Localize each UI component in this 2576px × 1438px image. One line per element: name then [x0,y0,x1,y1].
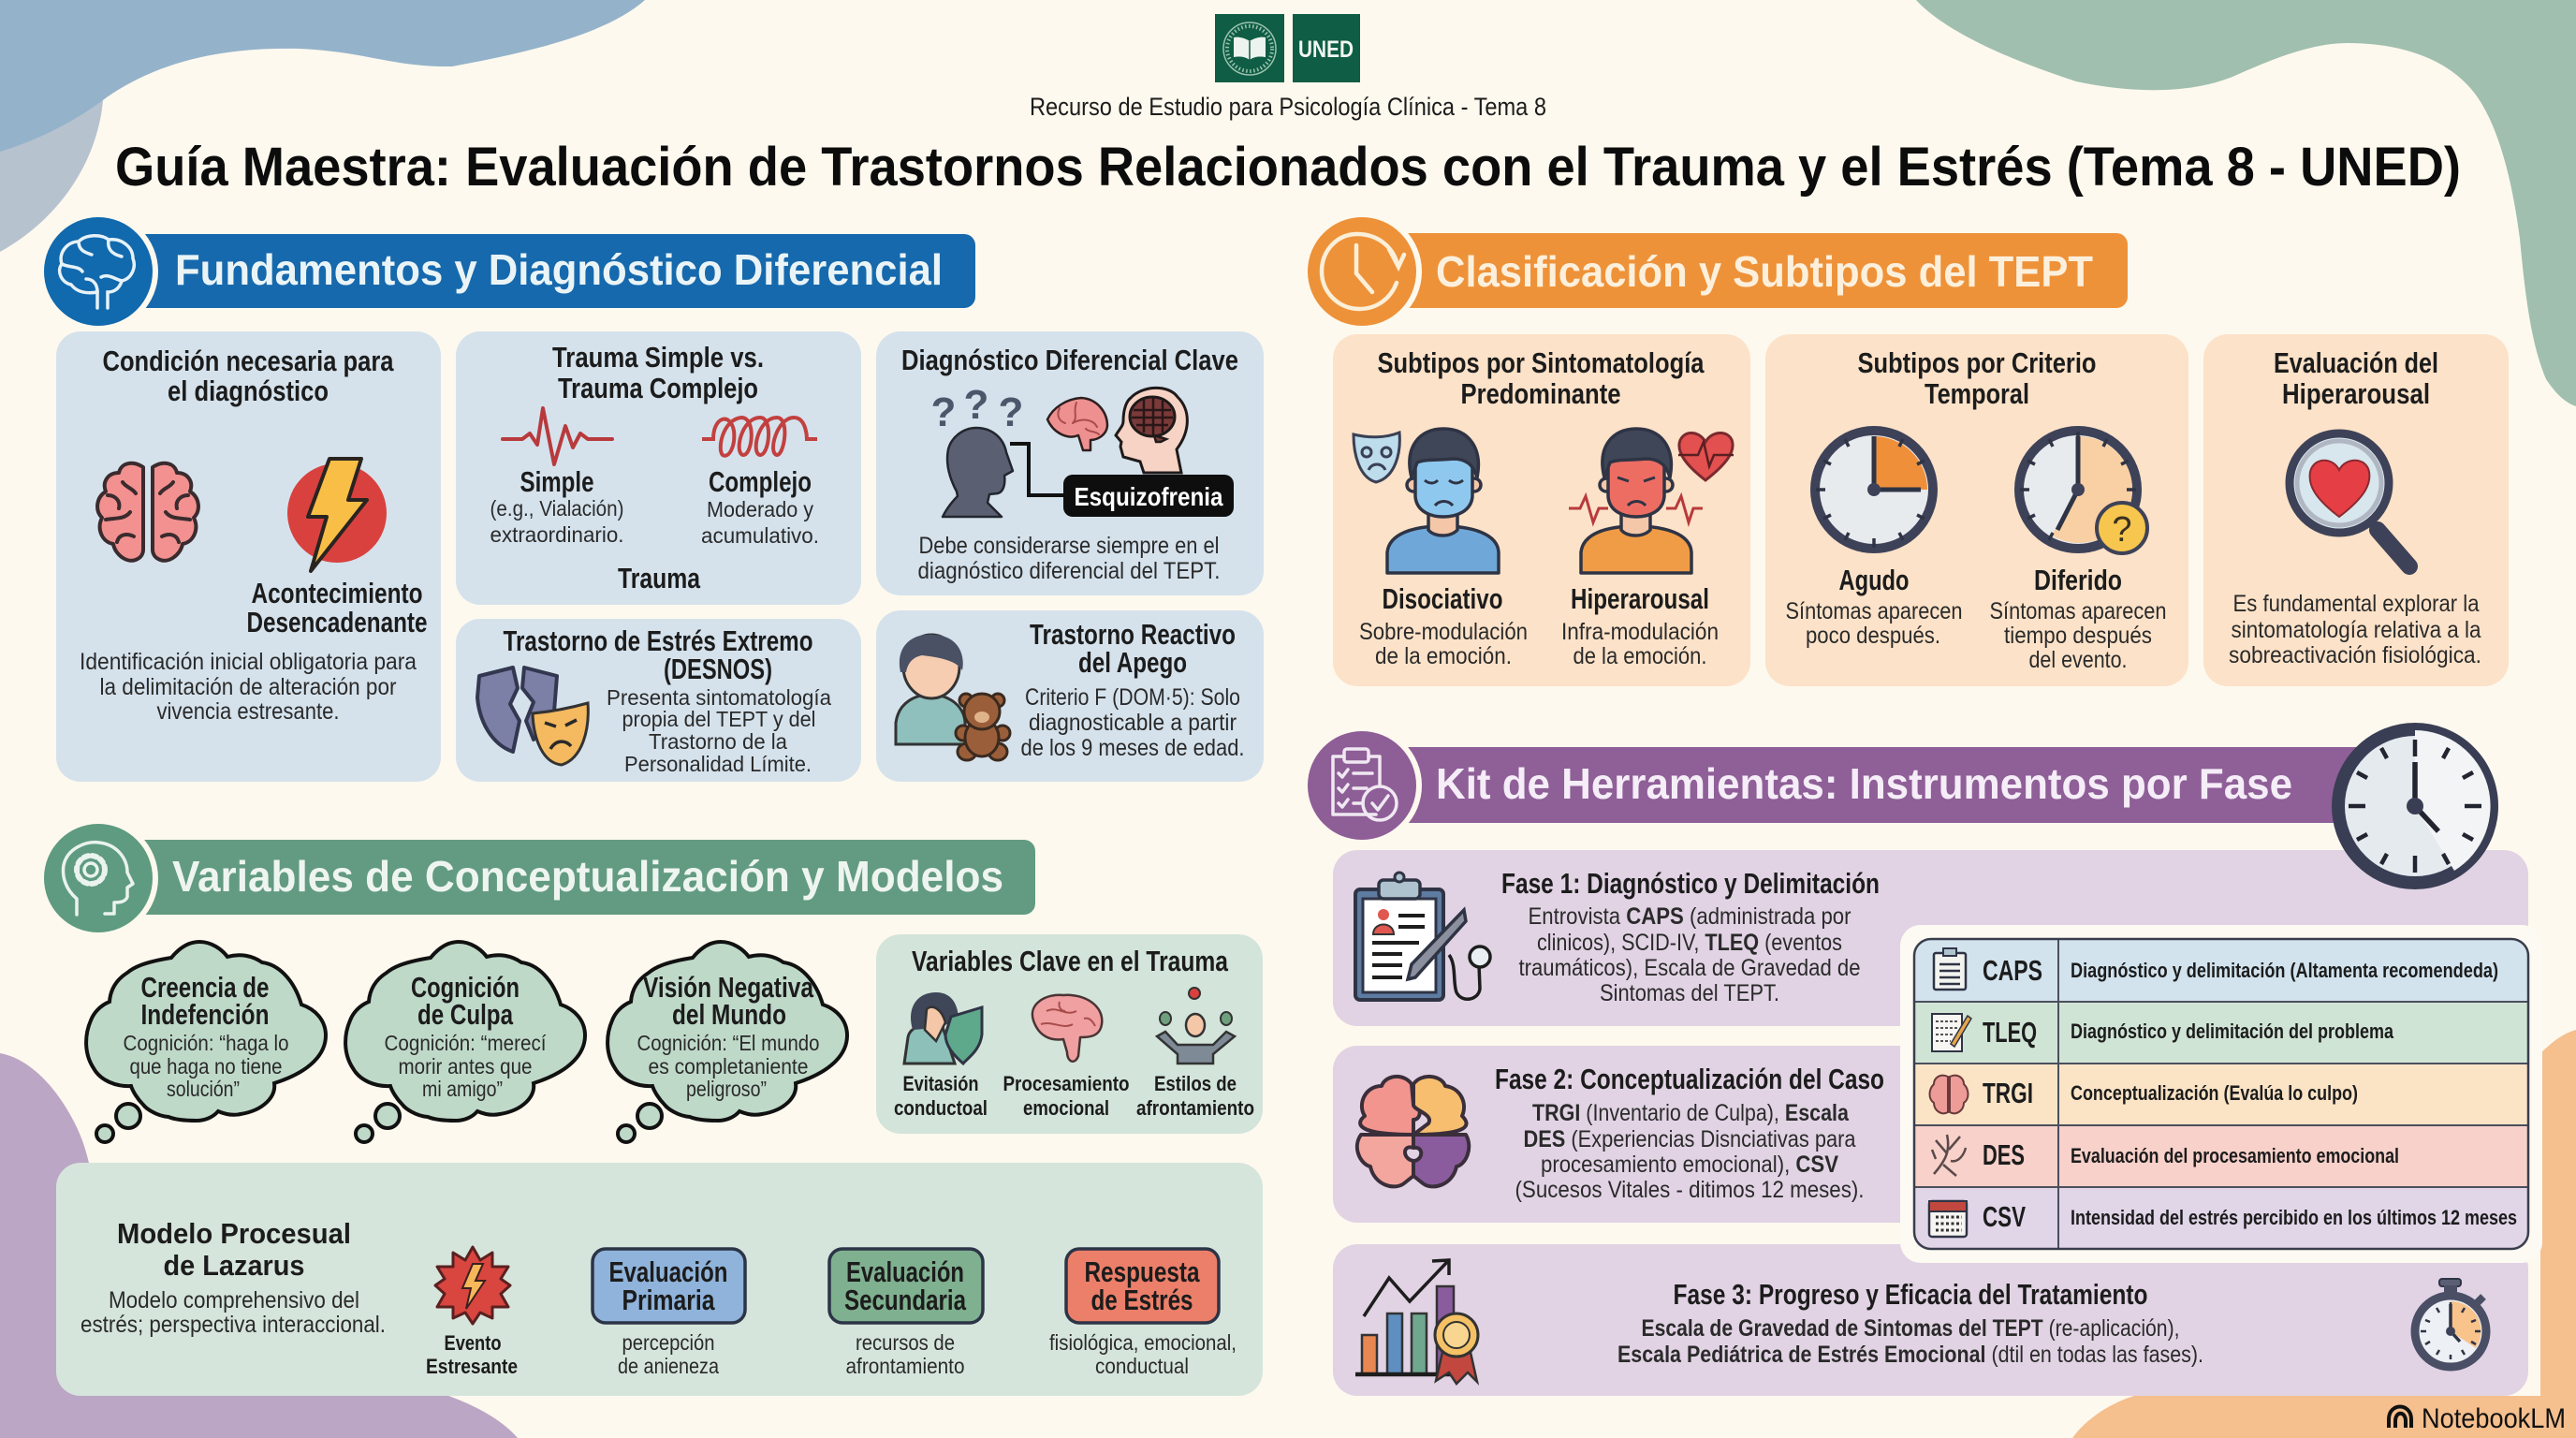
heading: Trauma Complejo [558,372,758,404]
label: diferido: del evento. [2029,647,2127,673]
icon: question marks and head: ? [931,389,956,435]
text block [607,685,831,776]
box: evaluación primaria: Evaluación [608,1255,728,1288]
text block: sintomatología relativa a la [2232,617,2481,643]
icon: clock diferido [2019,431,2147,553]
section header: Clasificación y Subtipos del TEPT [1302,212,2128,331]
label: simple: Simple [520,465,593,498]
label: disociativo [1359,582,1528,669]
caption: fisiológica, emocional, [1049,1330,1237,1355]
box: evaluación secundaria: Evaluación [846,1255,964,1288]
row: CAPS [1934,948,2498,990]
label: diferido: tiempo después [2004,623,2152,649]
icon: question marks and head: ? [964,382,988,428]
thought bubble: visión negativa del mundo: peligroso” [686,1077,767,1101]
icon: brain [1032,995,1102,1062]
heading [1857,346,2097,410]
logo: UNED [1215,14,1360,82]
label: diferido [1990,564,2166,673]
text block: la delimitación de alteración por [99,674,397,700]
heading: del Apego [1078,646,1187,679]
text block: traumáticos), Escala de Gravedad de [1518,955,1861,981]
box: evaluación primaria: Primaria [622,1284,715,1316]
heading [504,624,812,685]
thought bubble: creencia de indefensión: que haga no tiene [129,1054,283,1078]
icon: heart [1678,433,1734,480]
label: diferido: Síntomas aparecen [1990,598,2166,624]
text block: sobreactivación fisiológica. [2229,642,2481,668]
text block: Modelo comprehensivo del [109,1287,359,1313]
row: TRGI: Conceptualización (Evalúa lo culpo) [2071,1081,2358,1105]
row: DES: Evaluación del procesamiento emocional [2071,1144,2399,1167]
label: acontecimiento [247,577,427,638]
thought bubble: visión negativa del mundo: es completaniente [648,1054,809,1078]
label: esquizofrenia: Esquizofrenia [1075,482,1223,511]
box: respuesta de estrés: de Estrés [1091,1284,1193,1316]
text block: Es fundamental explorar la [2233,591,2480,617]
text block: diagnóstico diferencial del TEPT. [917,558,1221,584]
section header: Fundamentos y Diagnóstico Diferencial: Fundamentos y Diagnóstico Diferencial [175,245,943,294]
icon: child with teddy bear [896,635,1010,760]
text block [917,533,1221,584]
panel: trastorno reactivo del apego [876,610,1264,782]
panel: diagnóstico diferencial clave [876,331,1264,595]
label: trauma: Trauma [618,562,701,594]
label: agudo: Síntomas aparecen [1786,598,1962,624]
label: complejo: Complejo [709,465,812,498]
icon: calendar [1929,1201,1967,1237]
icon: head with gear [64,843,133,915]
thought bubble: creencia de indefensión: Cognición: “haga lo [124,1031,288,1055]
label: agudo [1786,564,1962,649]
panel: condición necesaria [56,331,441,782]
heading: Diagnóstico Diferencial Clave [901,344,1238,376]
caption [1049,1330,1237,1378]
icon: lightning in red circle [287,459,387,571]
row: TLEQ: TLEQ [1983,1016,2037,1049]
icon: question marks and head [931,382,1064,517]
label: diferido: Diferido [2034,564,2122,596]
text block [1617,1315,2203,1368]
heading: Hiperarousal [2282,377,2430,410]
icon: juggler [1157,988,1235,1064]
icon: brain [1930,1076,1968,1113]
icon: person with shield [904,992,982,1064]
heading [117,1217,351,1282]
label: acontecimiento: Desencadenante [247,606,427,638]
label: evitación: Evitasión [902,1072,979,1095]
section header: Clasificación y Subtipos del TEPT: Clasificación y Subtipos del TEPT [1436,247,2093,296]
icon: stopwatch [2415,1279,2486,1367]
label: disociativo: de la emoción. [1375,643,1512,669]
section header: Kit de Herramientas: Kit de Herramientas: Instrumentos por Fase [1436,759,2292,808]
panel: variables clave en el trauma [876,934,1263,1134]
icon: clock agudo [1815,431,1933,549]
table rows [1914,939,2528,1249]
label: agudo: poco después. [1806,623,1940,649]
label: procesamiento: emocional [1023,1096,1109,1120]
heading: de Lazarus [163,1249,305,1282]
heading: (DESNOS) [664,653,772,685]
icon: chart with rosette [1355,1260,1478,1384]
text block: Presenta sintomatología [607,685,831,710]
row: TRGI [1930,1076,2358,1113]
text block: Sintomas del TEPT. [1600,980,1779,1006]
panel: modelo procesual de Lazarus [56,1163,1263,1396]
thought bubble: cognición de culpa: Cognición: “merecí [384,1031,547,1055]
label: evento estresante: Evento [444,1331,502,1355]
text block: de los 9 meses de edad. [1020,735,1245,761]
panel: subtipos por criterio temporal [1765,334,2188,686]
thought bubble: visión negativa del mundo: del Mundo [672,998,786,1031]
row: CAPS: Diagnóstico y delimitación (Altamenta recomendeda) [2071,959,2498,982]
text block: Escala Pediátrica de Estrés Emocional (dtil en todas las fases). [1617,1342,2203,1368]
section header: Variables de Conceptualización y Modelos [38,818,1035,938]
text block [1515,1100,1865,1203]
icon: ecg marks [1569,496,1703,522]
heading [2274,346,2438,410]
heading: Fase 2: Conceptualización del Caso [1495,1063,1884,1095]
label: simple: (e.g., Vialación) [490,496,623,521]
heading [103,345,394,407]
icon: document [1934,948,1966,990]
caption: conductual [1095,1354,1189,1378]
heading: Subtipos por Criterio [1857,346,2097,379]
heading: Trauma Simple vs. [552,341,764,374]
box: evaluación secundaria [829,1249,983,1323]
row: CSV: CSV [1983,1200,2026,1233]
icon: clock with arrow [1322,234,1404,309]
caption [618,1330,719,1378]
subtitle: Recurso de Estudio para Psicología Clínica - Tema 8 [1030,93,1546,121]
label: acontecimiento: Acontecimiento [251,577,423,609]
icon: brain outline [60,236,134,308]
text block [80,649,417,725]
thought bubble: visión negativa del mundo: Visión Negativa [643,971,814,1004]
text block: DES (Experiencias Disnciativas para [1524,1126,1856,1152]
heading: Fase 1: Diagnóstico y Delimitación [1501,867,1880,900]
label: procesamiento [1003,1072,1129,1120]
thought bubble: cognición de culpa: de Culpa [417,998,514,1031]
panel: fase 2 [1333,1046,1932,1223]
icon: clipboard and stethoscope [1355,873,1490,1000]
label: hiperarousal: Infra-modulación [1561,619,1719,645]
label: esquizofrenia [1063,475,1234,517]
icon: coil [702,418,817,456]
icon: tree of branches [1932,1135,1966,1176]
label: agudo: Agudo [1838,564,1910,596]
section header: Variables de Conceptualización y Modelos: Variables de Conceptualización y Modelos [172,852,1003,901]
thought bubble: cognición de culpa: morir antes que [399,1054,532,1078]
text block: Identificación inicial obligatoria para [80,649,417,675]
section header: Kit de Herramientas [1302,726,2378,845]
icon: question marks and head: ? [999,389,1023,435]
text block: diagnosticable a partir [1029,710,1237,736]
heading: Variables Clave en el Trauma [912,945,1229,977]
icon: magnifier with heart [2290,433,2409,566]
heading: Modelo Procesual [117,1217,351,1250]
label: hiperarousal: de la emoción. [1573,643,1707,669]
text block: vivencia estresante. [157,698,339,725]
label: estilos: afrontamiento [1136,1096,1254,1120]
icon: small brain [1047,398,1107,450]
row: CAPS: CAPS [1983,954,2042,987]
label: evitación: conductoal [894,1096,988,1120]
icon: puzzle brain [1357,1077,1469,1186]
text block: TRGI (Inventario de Culpa), Escala [1532,1100,1850,1126]
title: Guía Maestra: Evaluación de Trastornos Relacionados con el Trauma y el Estrés (Tema 8 - UNED) [115,137,2461,198]
thought bubble: cognición de culpa: mi amigo” [422,1077,503,1101]
heading: Condición necesaria para [103,345,394,377]
icon: large clock [2338,729,2492,883]
text block: Criterio F (DOM·5): Solo [1025,684,1240,711]
label: estilos: Estilos de [1154,1072,1237,1095]
row: CSV [1929,1200,2517,1237]
label: hiperarousal [1561,582,1719,669]
thought bubble: cognición de culpa: Cognición [411,971,520,1004]
icon: ecg line [503,408,612,464]
text block: estrés; perspectiva interaccional. [80,1312,386,1338]
heading: Predominante [1460,377,1621,410]
icon: sad mask [1354,433,1399,482]
heading: Evaluación del [2274,346,2438,379]
panel: tabla de instrumentos [1900,925,2542,1263]
thought bubble: visión negativa del mundo: Cognición: “El mundo [637,1031,820,1055]
text block [1020,684,1245,761]
label: disociativo: Sobre-modulación [1359,619,1528,645]
icon: hyperaroused person [1581,429,1691,573]
label: simple [490,465,623,547]
panel: DESNOS [456,619,861,782]
label: estilos [1136,1072,1254,1120]
thought bubble: creencia de indefensión: solución” [167,1077,240,1101]
text block [2229,591,2481,668]
text block: clinicos), SCID-IV, TLEQ (eventos [1537,930,1842,956]
caption: de anieneza [618,1354,719,1378]
caption: percepción [622,1330,715,1355]
text block: Personalidad Límite. [624,752,812,776]
icon: stress burst [435,1247,510,1324]
thought bubble: cognición de culpa [345,942,585,1142]
caption: recursos de [856,1330,955,1355]
label: evitación [894,1072,988,1120]
section header: Fundamentos y Diagnóstico Diferencial [38,212,975,331]
panel: fase 1 [1333,850,2528,1026]
label: disociativo: Disociativo [1382,582,1503,615]
heading [1030,618,1236,679]
icon: broken shield [477,668,557,752]
box: evaluación primaria [593,1249,745,1323]
icon: brain [97,463,198,561]
text block: Escala de Gravedad de Sintomas del TEPT (re-aplicación), [1642,1315,2179,1342]
row: DES [1932,1135,2399,1176]
heading: Temporal [1925,377,2029,410]
icon: clock diferido: ? [2112,510,2132,550]
text block: propia del TEPT y del [622,707,816,731]
text block: Trastorno de la [649,729,787,754]
icon: sad mask [533,703,588,765]
label: complejo: Moderado y [707,497,813,521]
box: respuesta de estrés [1066,1249,1219,1323]
text block: Entrovista CAPS (administrada por [1528,903,1852,930]
heading: el diagnóstico [168,374,329,407]
heading: Fase 3: Progreso y Eficacia del Tratamiento [1674,1278,2147,1311]
thought bubble: creencia de indefensión: Creencia de [140,971,270,1004]
panel: evaluación del hiperarousal [2203,334,2509,686]
heading: Trastorno de Estrés Extremo [504,624,812,657]
label: evento estresante [426,1331,518,1378]
thought bubble: visión negativa del mundo [607,942,847,1142]
label: simple: extraordinario. [490,522,623,547]
text block [1518,903,1861,1006]
caption: afrontamiento [846,1354,964,1378]
heading [552,341,764,404]
caption [846,1330,964,1378]
box: respuesta de estrés: Respuesta [1084,1255,1200,1288]
thought bubble: creencia de indefensión: Indefención [140,998,270,1031]
label: hiperarousal: Hiperarousal [1571,582,1709,615]
text block [80,1287,386,1338]
thought bubble: creencia de indefensión [86,942,326,1142]
text block: Debe considerarse siempre en el [919,533,1219,559]
heading [1378,346,1705,410]
row: TRGI: TRGI [1983,1077,2033,1109]
row: TLEQ [1932,1014,2394,1051]
heading: Trastorno Reactivo [1030,618,1236,651]
icon: questionnaire [1932,1014,1971,1051]
panel: trauma simple vs complejo [456,331,861,605]
icon: checklist [1333,749,1397,820]
heading: Subtipos por Sintomatología [1378,346,1705,379]
box: evaluación secundaria: Secundaria [844,1284,967,1316]
panel: fase 3 [1333,1244,2528,1396]
icon: head with tangled brain [1116,388,1187,473]
label: complejo: acumulativo. [701,523,819,548]
row: TLEQ: Diagnóstico y delimitación del problema [2071,1020,2394,1043]
panel: subtipos por sintomatología [1333,334,1750,686]
label: evento estresante: Estresante [426,1355,518,1378]
icon: dissociative person [1387,429,1499,573]
row: DES: DES [1983,1138,2025,1171]
text block: (Sucesos Vitales - ditimos 12 meses). [1515,1177,1865,1203]
label: complejo [701,465,819,548]
logo: UNED: UNED [1298,37,1354,63]
text block: procesamiento emocional), CSV [1541,1152,1838,1178]
label: procesamiento: Procesamiento [1003,1072,1129,1095]
